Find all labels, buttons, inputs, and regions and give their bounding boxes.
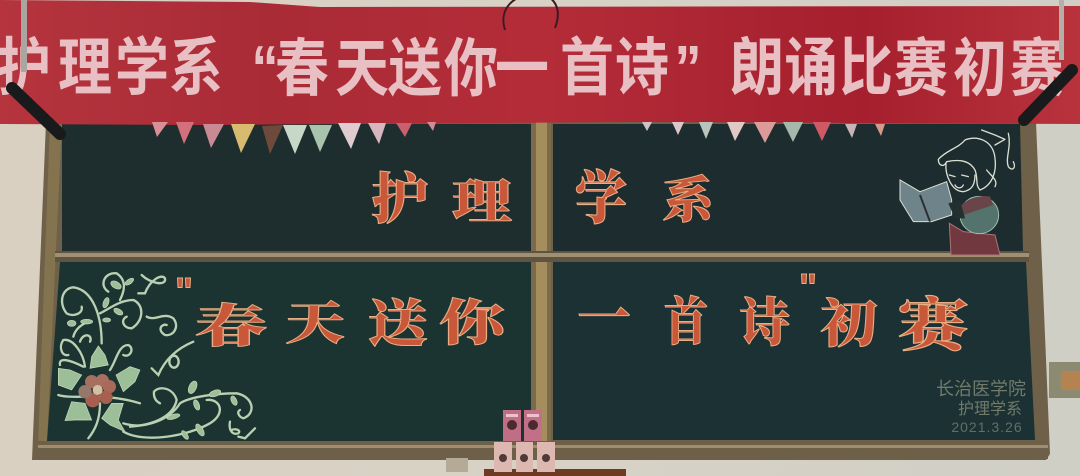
chalk heading: department: 系 (662, 172, 716, 228)
shoulder (960, 196, 993, 215)
hand (948, 200, 965, 218)
sleeve (960, 196, 999, 234)
board outer frame (32, 122, 1050, 460)
banner text: 春 (275, 35, 329, 104)
table (484, 469, 626, 476)
banner text: “ (252, 33, 278, 103)
bottom row box 2 (516, 442, 533, 472)
left board upper pane (62, 124, 533, 251)
left board lower pane (47, 262, 533, 441)
banner text: 诗 (615, 33, 669, 103)
banner text: 首 (560, 33, 614, 103)
chalk heading: department: 护 (371, 168, 429, 230)
flower (78, 374, 116, 407)
chalk title: poem contest: 赛 (898, 293, 976, 358)
top row box 2 (524, 410, 542, 441)
chalk title: poem contest: 一 (577, 289, 631, 348)
chalk signature: 2021.3.26 (951, 419, 1023, 435)
dress (949, 223, 1000, 255)
wall switch (1049, 362, 1080, 398)
chalk signature: 护理学系 (958, 400, 1022, 418)
banner text: 理 (58, 33, 112, 103)
chalk title: poem contest: 天 (285, 299, 345, 349)
chalk signature (936, 379, 1026, 435)
face (946, 163, 975, 192)
leaves (109, 279, 123, 291)
top row box 1 (503, 410, 521, 441)
banner text (0, 33, 1064, 104)
banner text: 朗 (730, 33, 784, 103)
chalk title: poem contest (175, 267, 976, 358)
centre frame post (531, 122, 551, 444)
banner (0, 0, 1080, 125)
banner text: ” (675, 33, 701, 103)
banner text: 赛 (894, 35, 948, 104)
chalk signature: 长治医学院 (936, 379, 1026, 399)
chalk heading: department: 学 (575, 167, 627, 231)
chalk drawing: floral vine (58, 273, 255, 440)
frame inner highlight (38, 122, 62, 446)
bottom row box 3 (537, 442, 555, 472)
chalk title: poem contest: 送 (368, 295, 430, 353)
banner text: 系 (169, 33, 223, 103)
hanging hoop (503, 0, 558, 30)
banner text: 赛 (1010, 35, 1064, 104)
banner text: 一 (495, 35, 549, 104)
banner text: 初 (953, 35, 1007, 104)
chalk heading: department: 理 (452, 176, 512, 228)
bow and hair curl (982, 130, 1014, 169)
bunting left (152, 122, 436, 154)
right board lower pane (553, 262, 1035, 440)
chalk title: poem contest: 你 (440, 296, 512, 351)
panel: blackboard (32, 122, 1050, 460)
small object on table (446, 458, 468, 472)
lower frame rail (38, 441, 1048, 459)
left bracket light (12, 0, 60, 134)
banner text: 天 (335, 35, 389, 104)
right bracket light (1024, 0, 1072, 120)
bottom row box 1 (494, 442, 512, 472)
chalk drawing: reading girl (900, 130, 1014, 255)
chalk title: poem contest: " (799, 267, 817, 309)
banner text: 学 (115, 33, 169, 103)
chalk title: poem contest: " (175, 271, 193, 313)
banner text: 比 (839, 33, 893, 103)
right board upper pane (553, 124, 1023, 251)
chalk title: poem contest: 诗 (740, 294, 790, 352)
horizontal frame rail (55, 251, 1029, 262)
chalk title: poem contest: 初 (820, 295, 878, 353)
hair outline (938, 138, 996, 190)
banner text: 送 (388, 35, 442, 104)
drink boxes (494, 410, 555, 472)
banner text: 诵 (784, 33, 838, 103)
banner text: 你 (444, 35, 498, 104)
bunting right (642, 122, 885, 143)
chalk title: poem contest: 春 (195, 301, 267, 352)
book (900, 180, 952, 222)
chalk heading: department (371, 167, 716, 231)
chalk title: poem contest: 首 (664, 294, 708, 352)
